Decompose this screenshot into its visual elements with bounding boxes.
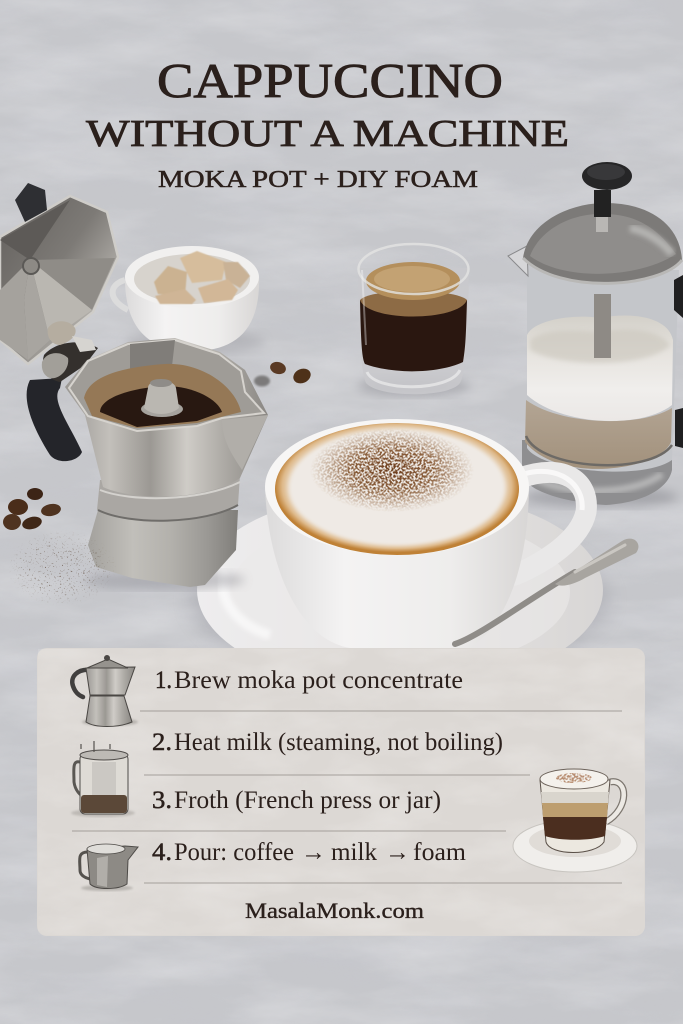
title: CAPPUCCINO bbox=[157, 53, 503, 108]
coffee beans near bowl bbox=[254, 360, 313, 386]
step 2: 2. bbox=[152, 729, 172, 756]
grounds bbox=[7, 530, 117, 606]
icon: frothing jug bbox=[80, 844, 138, 891]
open lid bbox=[0, 196, 118, 364]
step 4: 4. bbox=[152, 839, 172, 866]
french press bbox=[508, 162, 683, 508]
step 4: foam bbox=[413, 839, 467, 866]
illustration: layered cappuccino glass on saucer bbox=[513, 769, 637, 872]
step 3: Froth (French press or jar) bbox=[174, 787, 441, 814]
step 4: → bbox=[301, 839, 326, 866]
step 4: → bbox=[385, 839, 410, 866]
title bbox=[86, 53, 569, 155]
step 1: Brew moka pot concentrate bbox=[174, 667, 463, 694]
pot upper body bbox=[65, 338, 268, 497]
subtitle: MOKA POT + DIY FOAM bbox=[158, 166, 478, 193]
moka pot bbox=[0, 183, 268, 590]
step 3: 3. bbox=[152, 787, 172, 814]
pot base bbox=[88, 510, 238, 587]
base ring bbox=[522, 440, 672, 505]
foam bbox=[275, 423, 519, 555]
website: MasalaMonk.com bbox=[245, 898, 424, 923]
central post bbox=[141, 379, 183, 417]
steam bbox=[81, 741, 110, 752]
icon: moka pot bbox=[72, 655, 138, 726]
cappuccino cup bbox=[265, 419, 586, 648]
spout bbox=[508, 246, 528, 276]
sugar bowl bbox=[113, 246, 265, 354]
glass and layers bbox=[525, 270, 679, 472]
cinnamon dusting bbox=[310, 428, 474, 512]
cup body bbox=[265, 487, 529, 648]
stem and knob bbox=[582, 162, 632, 232]
saucer bbox=[190, 512, 610, 648]
lid knob bbox=[15, 183, 47, 222]
instruction panel bbox=[37, 648, 645, 936]
handle bbox=[27, 378, 82, 461]
handle pieces bbox=[674, 275, 683, 318]
sugar cubes bbox=[154, 251, 250, 304]
coffee beans and grounds bbox=[3, 488, 117, 606]
cup handle bbox=[515, 472, 586, 575]
inner wall bbox=[69, 340, 264, 431]
step 1: 1. bbox=[155, 667, 172, 694]
icon: milk pitcher with steam bbox=[71, 741, 135, 817]
step 4 bbox=[152, 839, 467, 866]
title: WITHOUT A MACHINE bbox=[86, 113, 569, 155]
espresso glass bbox=[358, 244, 470, 397]
crema and coffee bbox=[84, 364, 241, 428]
pot waist band bbox=[97, 475, 240, 521]
lid bbox=[523, 203, 682, 284]
step 4: milk bbox=[331, 839, 377, 866]
plunger rod bbox=[594, 294, 611, 358]
step 4: Pour: coffee bbox=[174, 839, 294, 866]
step 2: Heat milk (steaming, not boiling) bbox=[174, 729, 503, 756]
spoon bbox=[455, 539, 638, 644]
dividers bbox=[72, 711, 622, 883]
hinge bbox=[42, 321, 98, 382]
